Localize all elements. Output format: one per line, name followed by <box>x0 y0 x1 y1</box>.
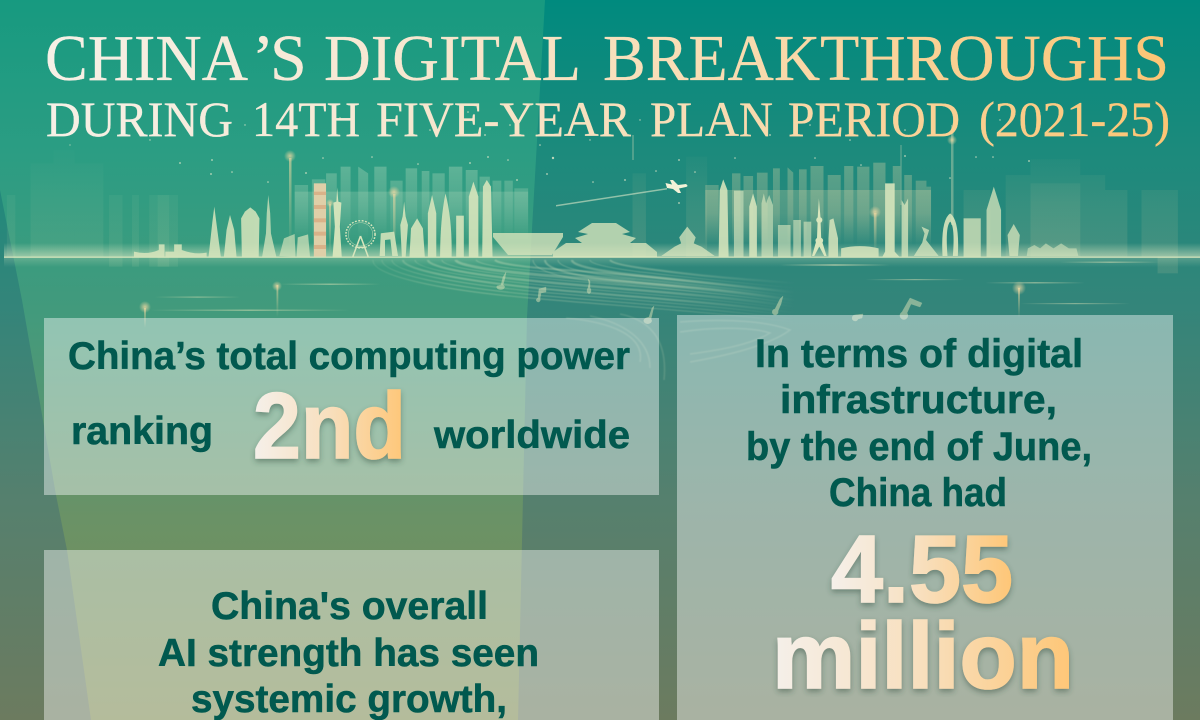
lamp posts and glows <box>139 125 1026 328</box>
ripple lines on water <box>373 260 795 322</box>
oriental pearl tower <box>812 198 827 256</box>
slim towers <box>882 183 908 257</box>
cluster of towers <box>400 180 493 257</box>
canton tower <box>333 187 342 257</box>
text: In terms of digital: In terms of digital <box>755 332 1083 376</box>
big word: million: million <box>772 603 1074 708</box>
low buildings <box>828 218 879 257</box>
water streaks <box>150 262 1160 311</box>
title line 2: PERIOD <box>788 91 960 147</box>
text: ranking: ranking <box>71 410 213 453</box>
title line 2: DURING <box>46 91 233 147</box>
text: infrastructure: infrastructure, <box>780 378 1057 422</box>
text: systemic growth: systemic growth, <box>191 678 507 720</box>
title line 1 <box>45 22 1169 95</box>
title line 2: (2021-25) <box>979 91 1170 147</box>
title line 2 <box>46 91 1170 147</box>
panel: AI strength <box>44 550 659 720</box>
text: by the end of June: by the end of June, <box>746 425 1092 469</box>
text: worldwide: worldwide <box>433 414 630 457</box>
text: China had: China had <box>829 471 1007 515</box>
stars and light specks <box>69 104 1071 204</box>
title line 2: FIVE-YEAR <box>376 91 632 147</box>
angular blocks <box>279 234 295 257</box>
landmarks, right half of skyline <box>661 179 1078 257</box>
text: AI strength: AI strength has seen <box>158 632 539 675</box>
text: China's overall: China's overall <box>211 585 488 628</box>
panel: computing power <box>44 318 659 495</box>
bridge <box>134 244 207 257</box>
expo pavilion and palace <box>493 223 657 257</box>
statue <box>914 227 939 256</box>
title line 1: CHINA <box>45 22 248 95</box>
temple of heaven <box>661 227 715 256</box>
title line 1: BREAKTHROUGHS <box>603 22 1169 95</box>
big number: 4.55: 4.55 <box>831 516 1013 623</box>
plane with contrail <box>556 180 688 206</box>
title line 1: ’ <box>252 22 274 95</box>
ripple arcs under cards <box>566 314 790 380</box>
horizon glow band <box>4 243 1200 267</box>
title line 1: DIGITAL <box>324 22 581 95</box>
big number: 2nd: 2nd <box>253 373 406 478</box>
small towers <box>964 187 1078 257</box>
horizon line <box>4 256 1200 258</box>
title <box>45 22 1170 147</box>
landmarks, left half of skyline <box>134 180 493 257</box>
title line 2: PLAN <box>650 91 773 147</box>
CCTV building <box>380 232 398 256</box>
tower <box>262 195 276 257</box>
faded city silhouette, left <box>295 167 528 242</box>
panel: digital infrastructure <box>677 315 1173 720</box>
title line 1: S <box>270 22 307 95</box>
title line 2: 14TH <box>252 91 360 147</box>
far background towers, right <box>633 157 1178 273</box>
arch tower <box>942 213 958 256</box>
text: computing power line: China’s total computing power <box>68 335 630 378</box>
faded city silhouette, right <box>705 163 931 252</box>
pagodas <box>209 207 259 257</box>
striped tower <box>314 183 326 257</box>
ferris wheel <box>346 221 375 257</box>
high-rise group <box>719 179 811 257</box>
far background towers, left <box>7 150 178 267</box>
music notes <box>497 272 922 324</box>
